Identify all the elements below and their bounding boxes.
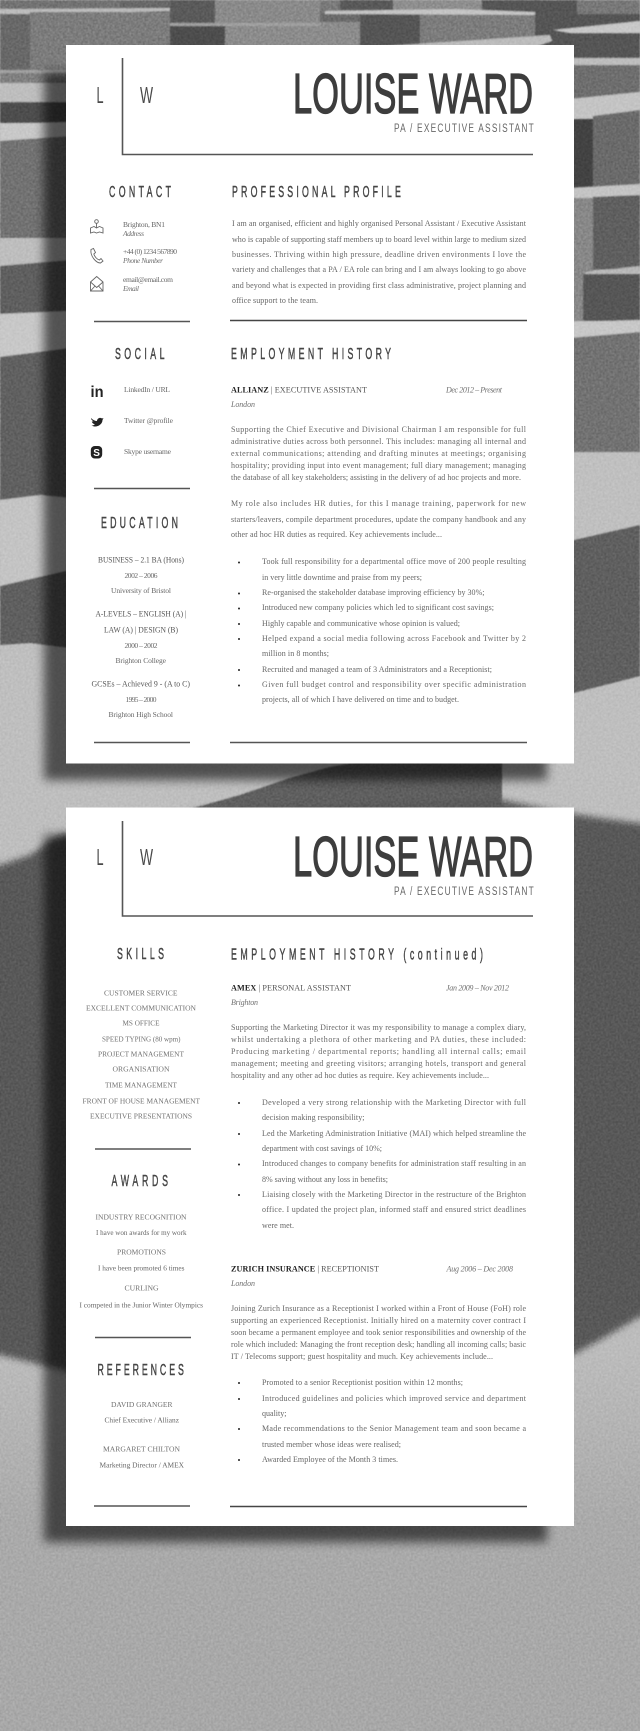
text block: profile: businesses. Thriving within high pressure, deadline driven environments I love the bbox=[232, 250, 526, 259]
education: college: Brighton College bbox=[116, 656, 167, 665]
heading: social: SOCIAL bbox=[115, 344, 164, 363]
bullet list: allianz achievements: Helped expand a social media following across Facebook and Twitter by 2 bbox=[262, 634, 526, 643]
monogram initials: L bbox=[96, 844, 104, 870]
header frame lines bbox=[122, 58, 533, 154]
reference: Margaret Chilton bbox=[100, 1444, 185, 1470]
bullet list: amex achievements: Developed a very strong relationship with the Marketing Director with full bbox=[262, 1098, 527, 1107]
bullet list: amex achievements: department with cost savings of 10%; bbox=[262, 1144, 382, 1153]
reference: Margaret Chilton: MARGARET CHILTON bbox=[103, 1444, 181, 1454]
bullet list: allianz achievements: Introduced new company policies which led to significant cost savings; bbox=[262, 603, 494, 612]
job: allianz location: London bbox=[230, 400, 255, 409]
text block: allianz paragraph 1: external communications; attending and drafting minutes at meetings; organising bbox=[231, 449, 526, 458]
bullet list: amex achievements: Led the Marketing Administration Initiative (MAI) which helped streamline the bbox=[262, 1129, 526, 1138]
reference: Margaret Chilton: Marketing Director / AMEX bbox=[100, 1460, 185, 1470]
text block: allianz paragraph 1: the database of all key stakeholders; assisting in the delivery of ad hoc projects and more. bbox=[231, 473, 521, 482]
bullet list: amex achievements: decision making responsibility; bbox=[262, 1113, 364, 1122]
contact: address bbox=[122, 220, 165, 238]
icon: skype bbox=[91, 446, 102, 459]
list: skills: EXCELLENT COMMUNICATION bbox=[86, 1004, 197, 1012]
education: university: 2002 – 2006 bbox=[124, 571, 158, 580]
heading: awards: AWARDS bbox=[112, 1171, 168, 1190]
panel: resume page 1 bbox=[66, 45, 574, 764]
icon: linkedin: in bbox=[90, 384, 104, 401]
text block: profile: who is capable of supporting staff members up to board level within large to medium sized bbox=[232, 235, 526, 244]
bullet list: allianz achievements: Took full responsibility for a departmental office move of 200 people resulting bbox=[262, 557, 526, 566]
contact: email: Email bbox=[122, 284, 139, 293]
education: school: 1995 – 2000 bbox=[126, 695, 157, 704]
reference: David Granger bbox=[104, 1400, 180, 1424]
bullet list: zurich achievements bbox=[238, 1378, 527, 1464]
text block: amex paragraph: whilst undertaking a plethora of other marketing and PA duties, these included: bbox=[231, 1035, 526, 1044]
list: skills: ORGANISATION bbox=[112, 1064, 170, 1074]
job: zurich title: ZURICH INSURANCE | RECEPTIONIST bbox=[231, 1264, 379, 1274]
job: amex title: AMEX | PERSONAL ASSISTANT bbox=[231, 984, 351, 992]
bullet list: allianz achievements: Re-organised the stakeholder database improving efficiency by 30%; bbox=[262, 588, 484, 597]
bullet list: zurich achievements: Made recommendations to the Senior Management team and soon became a bbox=[262, 1424, 526, 1433]
bullet list: amex achievements: 8% saving without any loss in benefits; bbox=[262, 1175, 388, 1184]
bullet list: amex achievements: office. I updated the project plan, informed staff and ensured strict deadlines bbox=[262, 1205, 526, 1214]
contact: address: Brighton, BN1 bbox=[123, 220, 165, 229]
text block: amex paragraph: Producing marketing / departmental reports; handling all internal calls; email bbox=[231, 1047, 527, 1056]
name heading: LOUISE WARD bbox=[293, 62, 533, 125]
panel: resume page 2 bbox=[66, 808, 574, 1526]
header frame lines bbox=[122, 821, 533, 916]
list: skills: TIME MANAGEMENT bbox=[105, 1080, 177, 1090]
list: skills: CUSTOMER SERVICE bbox=[104, 988, 178, 998]
text block: amex paragraph bbox=[231, 1023, 527, 1080]
bullet list: allianz achievements: Given full budget control and responsibility over specific administration bbox=[262, 680, 526, 689]
text block: amex paragraph: hospitality and any other ad hoc duties as require. Key achievements include... bbox=[231, 1071, 489, 1080]
bullet list: zurich achievements: Promoted to a senior Receptionist position within 12 months; bbox=[262, 1378, 463, 1387]
icon: skype: S bbox=[93, 448, 100, 459]
icon: phone bbox=[91, 248, 103, 263]
contact: email bbox=[122, 275, 173, 293]
education: university: University of Bristol bbox=[111, 586, 171, 595]
heading: employment history continued: EMPLOYMENT HISTORY (continued) bbox=[231, 945, 483, 963]
text block: amex paragraph: management; meeting and greeting visitors; arranging hotels, transport and general bbox=[231, 1059, 527, 1068]
text block: profile: variety and challenges that a PA / EA role can bring and I am always looking to go above bbox=[232, 265, 526, 274]
monogram initials: W bbox=[140, 846, 153, 871]
bullet list: amex achievements: Liaising closely with the Marketing Director in the restructure of the Brighton bbox=[262, 1190, 526, 1199]
bullet list: allianz achievements: projects, all of which I have delivered on time and to budget. bbox=[262, 695, 459, 704]
contact: email: email@email.com bbox=[123, 275, 173, 284]
education: college bbox=[96, 610, 187, 665]
contact: phone bbox=[122, 247, 177, 265]
bullet list: allianz achievements: Recruited and managed a team of 3 Administrators and a Receptionist; bbox=[262, 665, 492, 674]
text block: zurich paragraph: role which included: Managing the front reception desk; handling all incoming calls; basic bbox=[231, 1340, 526, 1349]
list: awards: I competed in the Junior Winter Olympics bbox=[80, 1300, 203, 1310]
sheet page 2 bbox=[66, 808, 574, 1526]
monogram initials bbox=[96, 82, 153, 109]
education: school: Brighton High School bbox=[108, 710, 173, 719]
text block: allianz paragraph 2: other ad hoc HR duties as required. Key achievements include... bbox=[231, 530, 442, 539]
social: linkedin: LinkedIn / URL bbox=[124, 385, 170, 394]
text block: profile: I am an organised, efficient and highly organised Personal Assistant / Executive Assistant bbox=[232, 219, 527, 228]
education: college: A-LEVELS – ENGLISH (A) | bbox=[96, 610, 187, 618]
list: awards: PROMOTIONS bbox=[117, 1248, 166, 1256]
bullet list: amex achievements: were met. bbox=[262, 1221, 294, 1230]
text block: allianz paragraph 2: My role also includes HR duties, for this I manage training, paperwork for new bbox=[231, 499, 526, 508]
bullet list: amex achievements: Introduced changes to company benefits for administration staff resulting in an bbox=[262, 1159, 526, 1168]
heading: education: EDUCATION bbox=[101, 513, 178, 532]
list: awards: I have been promoted 6 times bbox=[98, 1264, 185, 1272]
job: zurich dates: Aug 2006 – Dec 2008 bbox=[446, 1264, 513, 1274]
icon: map pin bbox=[90, 220, 103, 233]
reference: David Granger: Chief Executive / Allianz bbox=[104, 1416, 180, 1424]
text block: zurich paragraph: IT / Telecoms support; guest hospitality and much. Key achievements include... bbox=[231, 1352, 493, 1361]
heading: contact: CONTACT bbox=[109, 182, 171, 201]
reference: David Granger: DAVID GRANGER bbox=[111, 1400, 172, 1409]
monogram initials bbox=[96, 844, 153, 871]
list: skills bbox=[82, 988, 200, 1120]
contact: phone: Phone Number bbox=[122, 256, 163, 265]
list: skills: EXECUTIVE PRESENTATIONS bbox=[90, 1112, 192, 1120]
list: awards: CURLING bbox=[124, 1284, 159, 1292]
contact: address: Address bbox=[122, 229, 144, 238]
social: skype: Skype username bbox=[124, 447, 172, 456]
icon: envelope bbox=[90, 276, 103, 291]
bullet list: zurich achievements: Awarded Employee of the Month 3 times. bbox=[262, 1455, 398, 1464]
bullet list: zurich achievements: quality; bbox=[262, 1409, 286, 1418]
text block: allianz paragraph 2: starters/leavers, compile department procedures, update the company handbook and any bbox=[231, 515, 526, 524]
name heading: LOUISE WARD bbox=[293, 825, 533, 888]
education: university: BUSINESS – 2.1 BA (Hons) bbox=[98, 556, 184, 564]
job title: PA / EXECUTIVE ASSISTANT bbox=[394, 123, 534, 135]
list: skills: MS OFFICE bbox=[122, 1018, 160, 1028]
job: allianz title: ALLIANZ | EXECUTIVE ASSISTANT bbox=[231, 386, 367, 394]
heading: employment history: EMPLOYMENT HISTORY bbox=[231, 344, 391, 363]
text block: allianz paragraph 1: hospitality; providing input into event management; full diary management; managing bbox=[231, 461, 526, 470]
bullet list: allianz achievements: million in 8 months; bbox=[262, 649, 329, 658]
list: skills: SPEED TYPING (80 wpm) bbox=[102, 1034, 181, 1044]
list: awards: INDUSTRY RECOGNITION bbox=[96, 1212, 187, 1222]
icon: twitter bbox=[91, 418, 104, 427]
education: university bbox=[98, 556, 184, 595]
text block: allianz paragraph 1 bbox=[231, 425, 527, 482]
drop shadow: second sheet bbox=[44, 835, 547, 1542]
job: amex dates: Jan 2009 – Nov 2012 bbox=[446, 984, 509, 992]
text block: allianz paragraph 1: Supporting the Chief Executive and Divisional Chairman I am responsible for full bbox=[231, 425, 527, 434]
list: awards bbox=[80, 1212, 203, 1310]
heading: professional profile: PROFESSIONAL PROFILE bbox=[232, 182, 401, 201]
bullet list: zurich achievements: Introduced guidelines and policies which improved service and department bbox=[262, 1394, 527, 1403]
text block: zurich paragraph bbox=[231, 1304, 526, 1361]
list: skills: PROJECT MANAGEMENT bbox=[98, 1050, 184, 1058]
job: zurich location: London bbox=[230, 1279, 255, 1288]
education: college: 2000 – 2002 bbox=[124, 641, 158, 650]
text block: zurich paragraph: supporting an experienced Receptionist. Initially hired on a maternity cover contract I bbox=[231, 1316, 526, 1325]
list: skills: FRONT OF HOUSE MANAGEMENT bbox=[82, 1096, 200, 1106]
education: school bbox=[92, 680, 190, 719]
bullet list: allianz achievements bbox=[238, 557, 526, 704]
education: school: GCSEs – Achieved 9 - (A to C) bbox=[92, 680, 190, 688]
contact: phone: +44 (0) 1234 567890 bbox=[123, 247, 177, 256]
education: college: LAW (A) | DESIGN (B) bbox=[104, 626, 178, 634]
text block: profile: office support to the team. bbox=[232, 296, 318, 305]
social: twitter: Twitter @profile bbox=[124, 416, 174, 425]
text block: amex paragraph: Supporting the Marketing Director it was my responsibility to manage a complex diary, bbox=[231, 1023, 526, 1032]
text block: profile: and beyond what is expected in providing first class administrative, project planning and bbox=[232, 281, 526, 290]
text block: profile bbox=[232, 219, 527, 305]
sheet page 1 bbox=[66, 45, 574, 764]
monogram initials: L bbox=[96, 82, 104, 108]
heading: references: REFERENCES bbox=[98, 1360, 184, 1379]
job: amex location: Brighton bbox=[231, 998, 258, 1007]
bullet list: zurich achievements: trusted member whose ideas were realised; bbox=[262, 1440, 401, 1449]
drop shadow: first sheet bbox=[44, 72, 547, 780]
bullet list: allianz achievements: Highly capable and communicative whose opinion is valued; bbox=[262, 619, 460, 628]
text block: zurich paragraph: soon became a permanent employee and took senior responsibilities and ownership of the bbox=[231, 1328, 526, 1337]
monogram initials: W bbox=[140, 84, 153, 109]
bullet list: amex achievements bbox=[238, 1098, 527, 1230]
heading: skills: SKILLS bbox=[117, 944, 164, 963]
job title: PA / EXECUTIVE ASSISTANT bbox=[394, 886, 534, 898]
bullet list: allianz achievements: in very little downtime and praise from my peers; bbox=[262, 573, 422, 582]
text block: allianz paragraph 2 bbox=[231, 499, 526, 539]
list: awards: I have won awards for my work bbox=[96, 1228, 187, 1237]
text block: allianz paragraph 1: administrative duties across both personnel. This includes: managing all internal and bbox=[231, 437, 526, 446]
job: allianz dates: Dec 2012 – Present bbox=[445, 386, 503, 394]
text block: zurich paragraph: Joining Zurich Insurance as a Receptionist I worked within a Front of House (FoH) role bbox=[231, 1304, 526, 1313]
